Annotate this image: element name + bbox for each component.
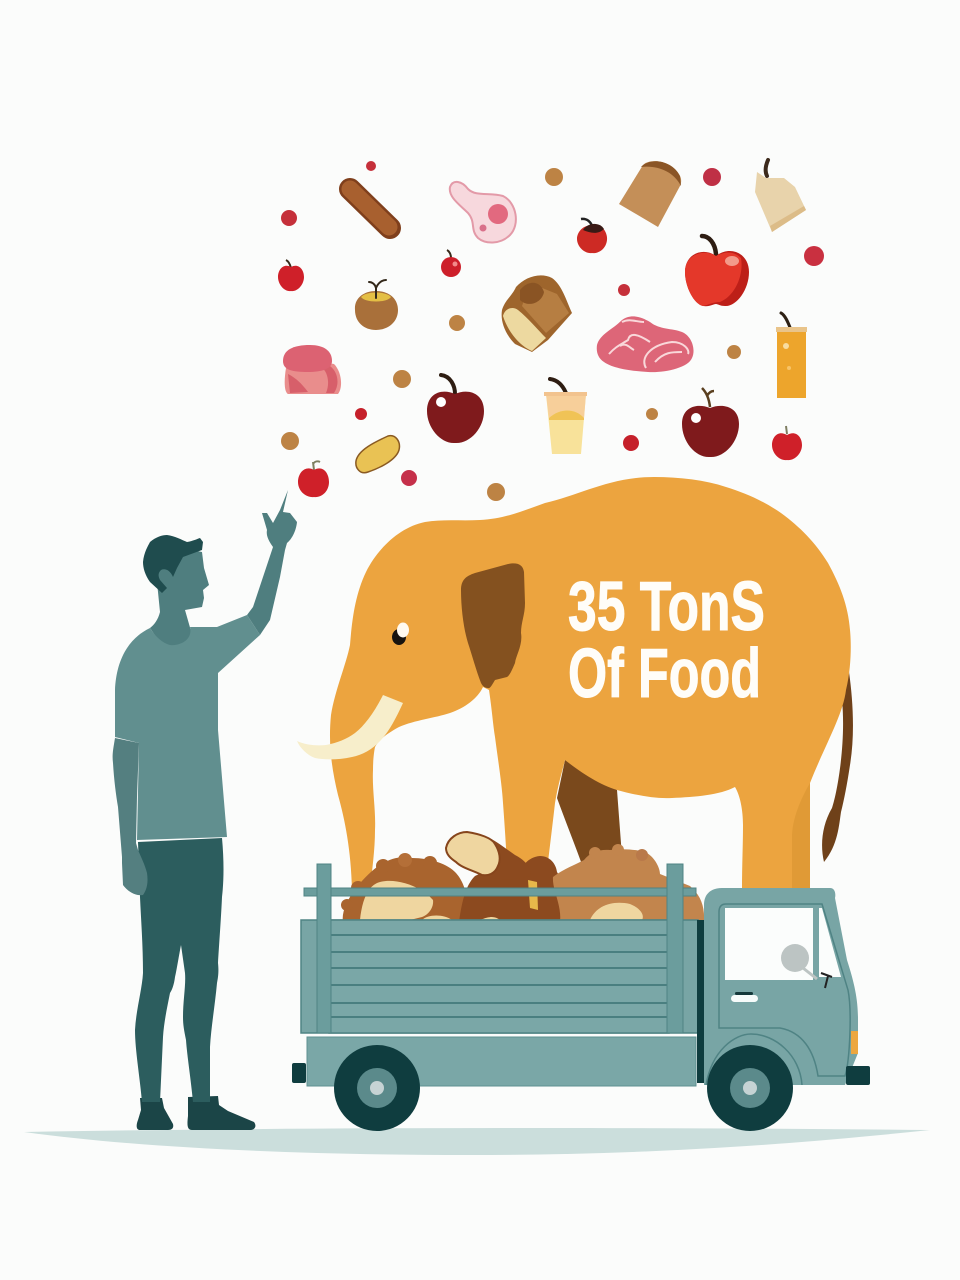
truck rear post (317, 864, 331, 1033)
food: cheese wedge (356, 436, 399, 473)
ground shadow (24, 1128, 930, 1155)
door handle (731, 992, 758, 1002)
food: dark apple centre (427, 375, 484, 443)
rear bumper (292, 1063, 306, 1083)
hair (143, 535, 203, 593)
floating food cloud (278, 160, 824, 501)
trousers (135, 838, 224, 1102)
label: 35 Tons Of Food: Of Food (568, 634, 761, 712)
front wheel (706, 1034, 802, 1131)
elephant tail (822, 668, 853, 862)
elephant (297, 477, 853, 890)
food: paper bag (755, 160, 806, 232)
elephant body (330, 477, 851, 890)
food: small apple near finger (298, 461, 329, 497)
food: sausage (350, 189, 390, 228)
food: cherry (441, 250, 461, 277)
front bumper (846, 1066, 870, 1085)
truck chassis (307, 1037, 696, 1086)
food: coconut with lid (355, 280, 398, 330)
shoes (137, 1096, 255, 1130)
food: dark apple right (682, 388, 739, 457)
truck side rail (304, 888, 696, 896)
food: stacked ham (283, 345, 341, 394)
right food mound (553, 844, 704, 922)
truck dark divider (697, 920, 704, 1083)
centre food mound (459, 856, 578, 922)
truck front post (667, 864, 683, 1033)
truck load of food (341, 832, 704, 922)
elephant ear (461, 563, 525, 688)
raised arm and hand (247, 490, 297, 635)
side mirror (781, 944, 832, 988)
label: 35 Tons Of Food: 35 TonS (568, 567, 765, 645)
t-shirt (115, 615, 260, 840)
elephant eye (392, 622, 409, 645)
left food mound (341, 853, 470, 922)
food: small dark-top apple (577, 219, 607, 253)
label: 35 Tons Of Food (568, 567, 765, 712)
far hind leg (557, 760, 623, 870)
truck cab (704, 888, 858, 1085)
hind leg shade (792, 783, 810, 890)
top food chunk (446, 832, 530, 879)
food: tall juice glass (776, 313, 807, 398)
food: small apple left (278, 260, 304, 291)
head and neck (150, 548, 209, 650)
food: lemonade cup (544, 379, 587, 454)
food: toast slice (619, 161, 681, 227)
food: big red apple (685, 236, 749, 306)
red and brown dots (281, 161, 824, 501)
truck cargo bed slats (301, 920, 698, 1033)
elephant tusk (297, 695, 403, 759)
man pointing up (113, 490, 297, 1130)
left arm and hand (113, 738, 148, 895)
food: small apple right (772, 426, 802, 460)
rear wheel (334, 1045, 420, 1131)
cab light (851, 1031, 858, 1054)
truck (292, 864, 870, 1131)
food: marbled meat (597, 316, 694, 372)
food: pink ham steak (450, 182, 516, 243)
food: bread loaf (502, 275, 572, 352)
